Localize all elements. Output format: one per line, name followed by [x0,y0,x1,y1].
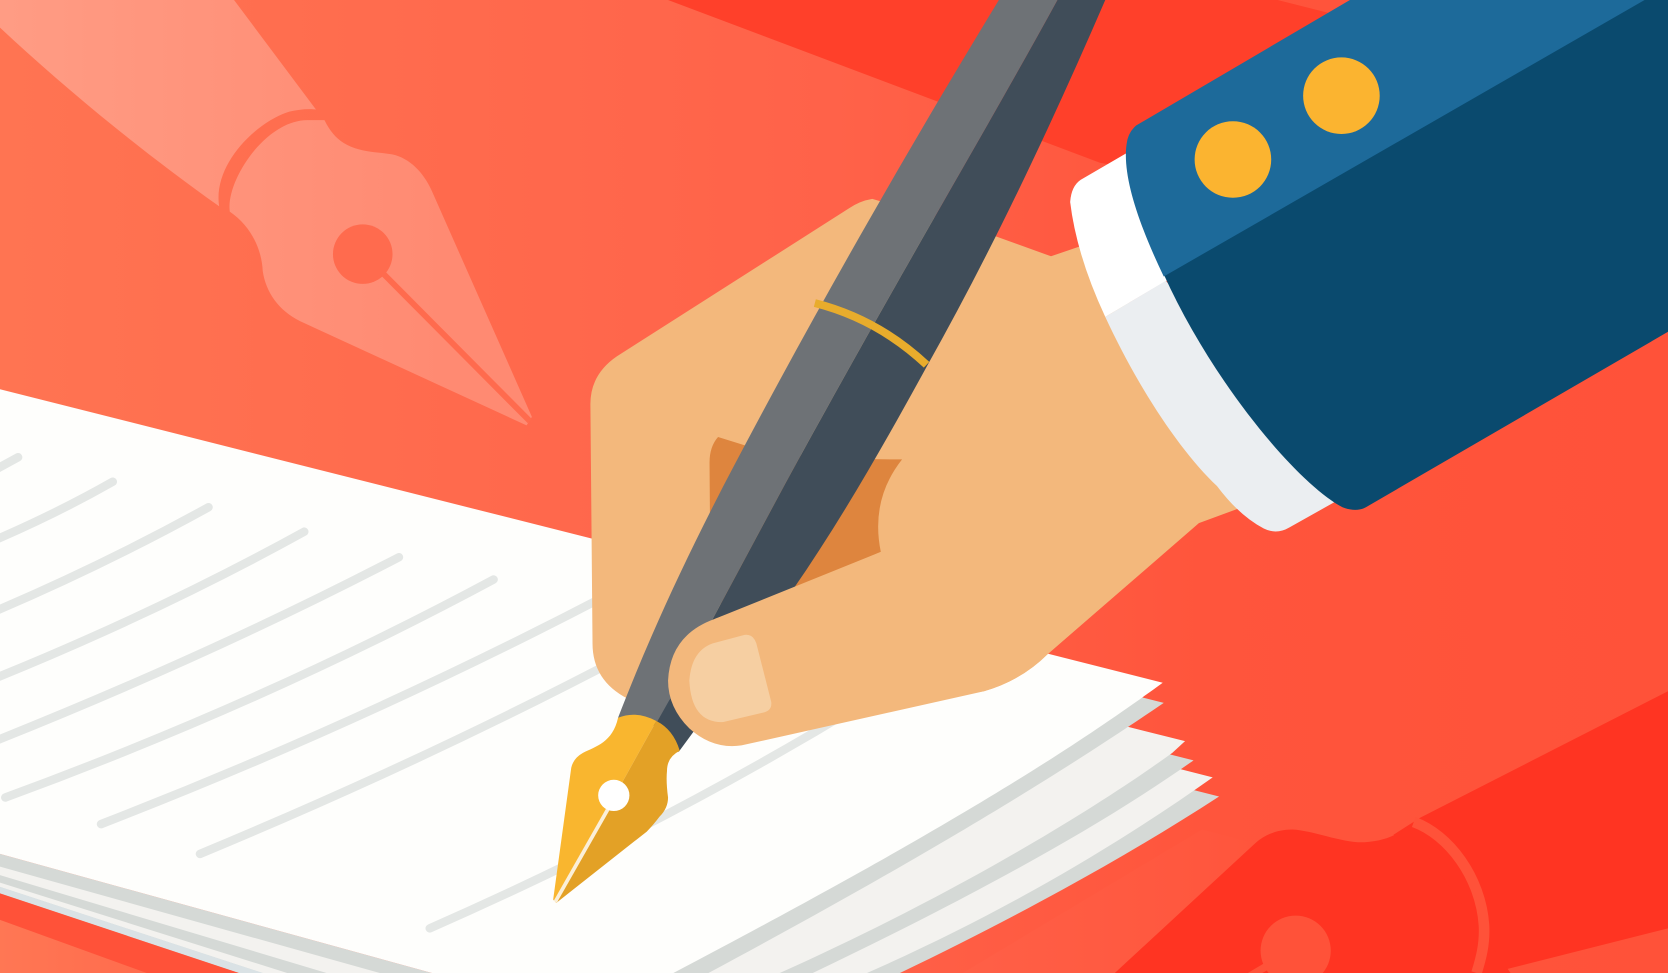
pen barrel dark side [651,0,1105,752]
button right [1303,57,1380,134]
sheet layer 3 [532,712,1213,973]
pen barrel light side [618,0,1057,723]
stack edges on the left [0,854,432,973]
ghost slit [1242,967,1266,973]
nib light side [553,715,656,903]
finger crease shadow [710,437,902,606]
faint lower band [963,829,1255,973]
cuff shaded part [1105,281,1342,531]
nib slit [555,808,608,902]
sheet edge layer 3 [532,731,1219,973]
thumb shape [668,548,1170,746]
paper stack [0,389,1219,973]
sheet edge layer 1 [532,651,1164,973]
thumb nail [689,635,771,722]
jacket sleeve [1126,0,1668,510]
nib dark side [556,721,680,903]
sheet layer 2 [532,684,1185,973]
shirt cuff [1070,149,1342,531]
top sheet [0,389,1163,973]
ghost hole [1261,916,1331,973]
ghost pen hole [333,224,393,284]
sleeve dark [1164,0,1668,510]
nib hole [598,780,629,811]
pen nib [553,715,680,903]
written lines [0,457,862,928]
thumb [668,548,1170,746]
cuff lit part [1070,149,1170,317]
hand [590,199,1277,734]
ghost nib [1115,827,1511,973]
pen gold band [815,303,927,365]
ghost pen bottom right [1115,691,1668,973]
ghost pen top left [0,0,532,425]
ghost pen barrel [0,0,316,206]
sleeve light [1126,0,1645,276]
ghost pen slit [383,273,530,421]
dark red diagonal band [668,0,1383,213]
fountain pen [618,0,1105,752]
bottom left stripe [0,893,239,973]
ghost pen nib [229,120,532,425]
dark red wedge [1394,691,1668,973]
button left [1195,121,1271,198]
sheet edge layer 2 [532,701,1194,973]
ghost ring [1414,822,1484,973]
